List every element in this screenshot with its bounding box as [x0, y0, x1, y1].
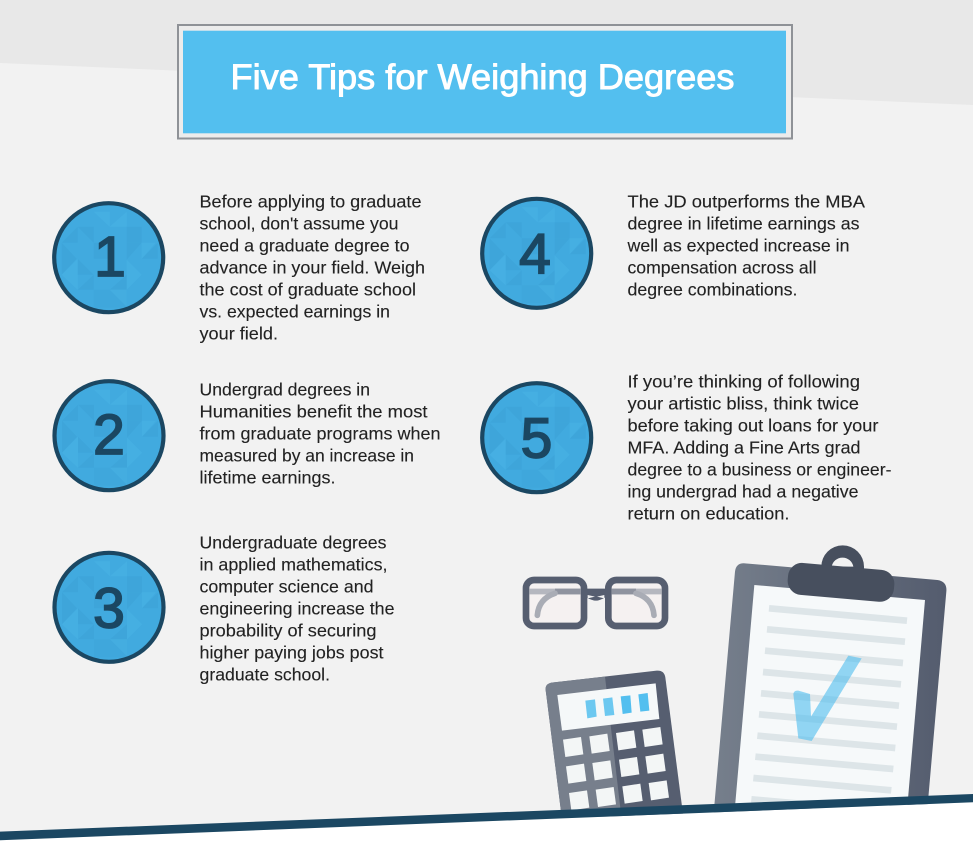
- text block: tip 5: degree to a business or engineer-: [628, 460, 892, 480]
- bottom edge: [0, 794, 973, 841]
- text block: tip 2: Humanities benefit the most: [200, 402, 428, 422]
- text block: tip 3: higher paying jobs post: [200, 642, 384, 662]
- text block: tip 2: measured by an increase in: [200, 446, 414, 466]
- icon: number badge 5: [482, 383, 591, 492]
- text block: tip 3: graduate school.: [200, 664, 330, 684]
- panel: tip 2: [54, 380, 445, 490]
- text block: tip 2: from graduate programs when: [200, 424, 440, 444]
- icon: calculator: [546, 671, 683, 817]
- icon: clipboard: [713, 545, 946, 817]
- icon: number badge 2: 2: [93, 403, 125, 467]
- text block: tip 4: well as expected increase in: [626, 235, 850, 255]
- text block: tip 5: your artistic bliss, think twice: [628, 394, 859, 414]
- icon: number badge 4: 4: [519, 222, 551, 286]
- title banner: [178, 25, 792, 138]
- text block: tip 5: ing undergrad had a negative: [628, 482, 858, 502]
- text block: tip 5: before taking out loans for your: [628, 416, 879, 436]
- text block: tip 1: school, don't assume you: [200, 213, 398, 233]
- text block: tip 3: engineering increase the: [200, 598, 394, 618]
- text block: tip 4: The JD outperforms the MBA: [628, 191, 865, 211]
- icon: number badge 1: [54, 203, 163, 312]
- icon: number badge 4: [482, 199, 591, 308]
- icon: number badge 3: 3: [93, 576, 125, 640]
- text block: tip 1: your field.: [200, 323, 278, 343]
- text block: tip 5: return on education.: [628, 504, 790, 524]
- text block: tip 1: Before applying to graduate: [200, 191, 422, 211]
- text block: tip 3: in applied mathematics,: [200, 554, 388, 574]
- text block: tip 4: degree in lifetime earnings as: [628, 213, 860, 233]
- icon: number badge 1: 1: [94, 225, 126, 289]
- panel: tip 4: [482, 191, 869, 308]
- text block: tip 2: Undergrad degrees in: [200, 380, 370, 400]
- icon: number badge 5: 5: [521, 406, 552, 470]
- text block: tip 1: the cost of graduate school: [200, 279, 416, 299]
- icon: glasses: [526, 580, 665, 626]
- text block: tip 3: probability of securing: [200, 620, 376, 640]
- panel: tip 3: [54, 532, 399, 684]
- text block: tip 4: compensation across all: [628, 257, 816, 277]
- text block: tip 2: lifetime earnings.: [200, 468, 336, 488]
- text block: tip 1: vs. expected earnings in: [200, 301, 390, 321]
- icon: number badge 2: [54, 381, 164, 490]
- icon: number badge 3: [54, 553, 164, 662]
- text block: tip 3: computer science and: [200, 576, 374, 596]
- text block: tip 5: If you’re thinking of following: [628, 372, 860, 392]
- text block: tip 1: need a graduate degree to: [200, 235, 410, 255]
- panel: tip 5: [482, 372, 896, 524]
- text block: tip 1: advance in your field. Weigh: [200, 257, 425, 277]
- text block: tip 5: MFA. Adding a Fine Arts grad: [628, 438, 860, 458]
- text block: tip 4: degree combinations.: [628, 279, 798, 299]
- text block: tip 3: Undergraduate degrees: [200, 532, 387, 552]
- title: Five Tips for Weighing Degrees: [230, 57, 734, 97]
- panel: tip 1: [54, 191, 430, 343]
